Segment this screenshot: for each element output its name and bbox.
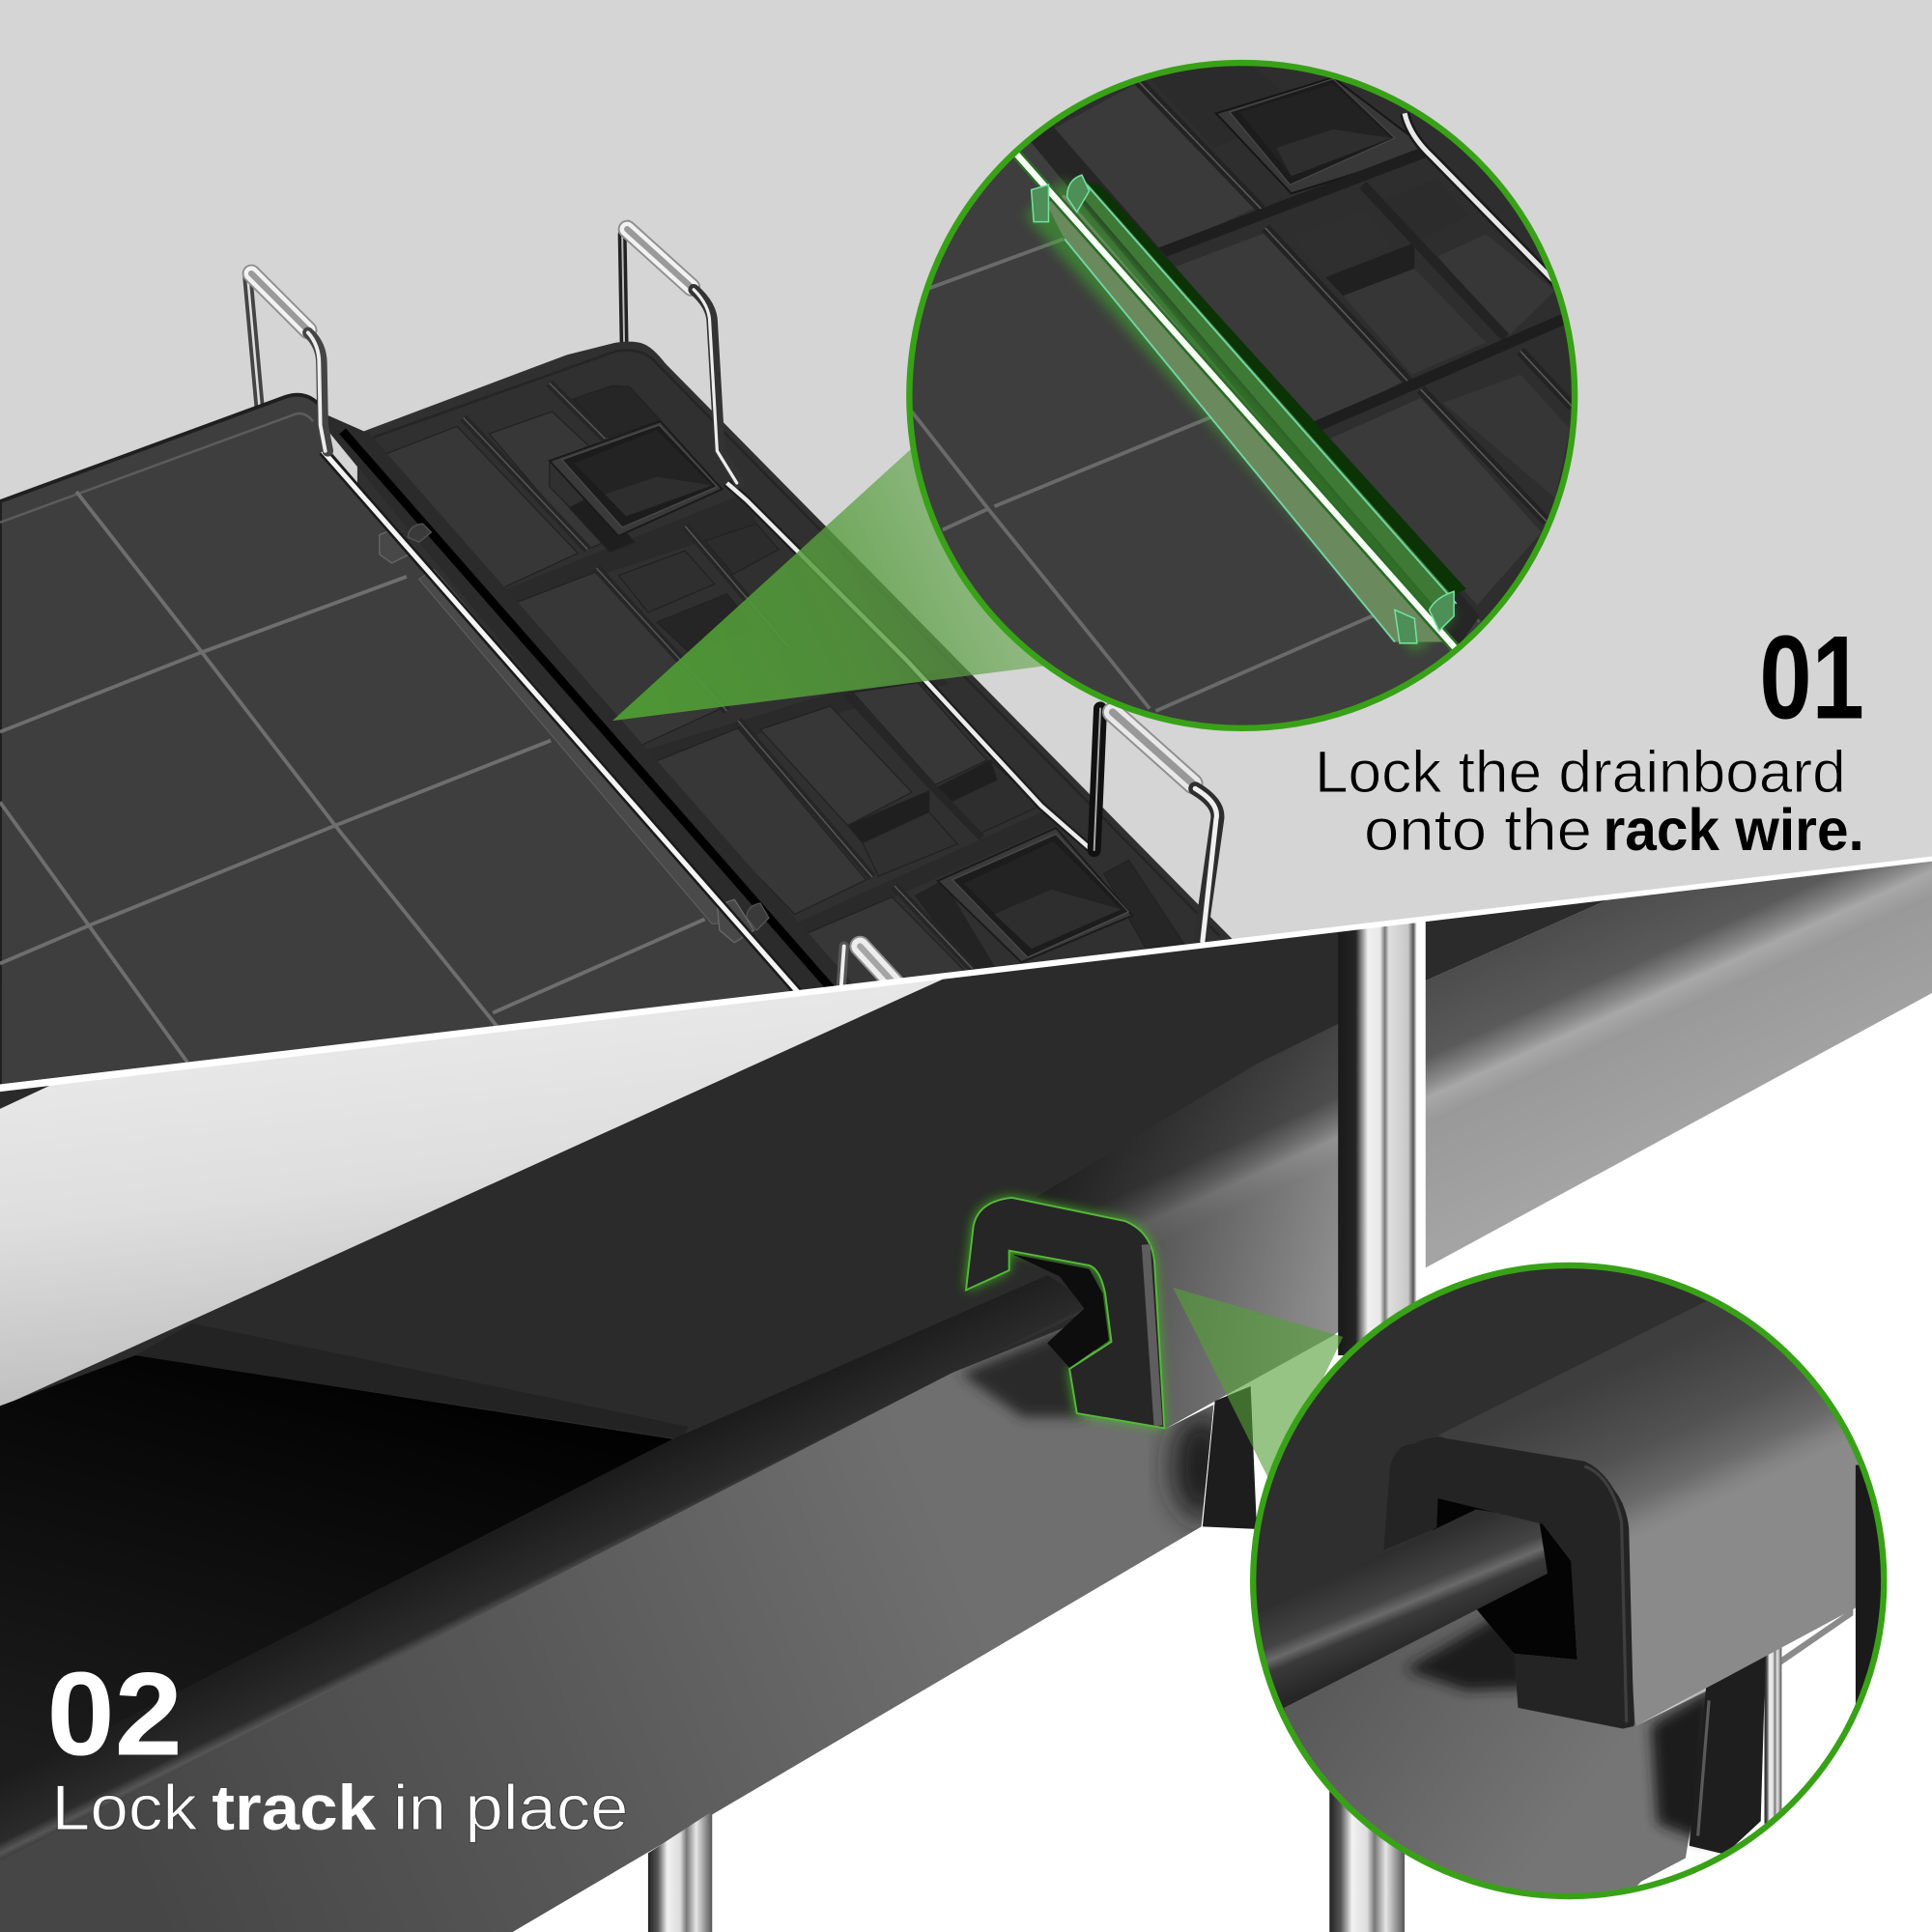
light wedge upper left bbox=[0, 971, 961, 1407]
compartment 6 bbox=[853, 683, 987, 784]
small lower right cell bbox=[938, 760, 1040, 835]
shadow next to bracket bbox=[1172, 1412, 1231, 1520]
circle 1 base bbox=[909, 63, 1575, 728]
step 01 caption bbox=[1315, 739, 1864, 863]
square cup bbox=[1216, 77, 1430, 193]
compartment 5 bbox=[760, 706, 912, 826]
pole reflection bbox=[1765, 1638, 1781, 1824]
black slot bbox=[343, 431, 850, 1010]
drainboard tabs bbox=[380, 529, 754, 943]
rod shadow near clip bbox=[961, 1324, 1084, 1417]
green rail bbox=[1069, 183, 1454, 607]
tray inner strip bbox=[135, 1323, 689, 1439]
rail edge bbox=[1046, 130, 1480, 622]
clip edge highlight bbox=[1584, 1466, 1627, 1722]
bracket leg bbox=[1690, 1654, 1766, 1855]
clip bbox=[1383, 1437, 1634, 1729]
end tabs bbox=[1032, 175, 1454, 643]
rim upper face bbox=[1035, 859, 1932, 1430]
grey rim block bbox=[1438, 1301, 1897, 1726]
small cell C bbox=[705, 524, 779, 574]
dark green slot bbox=[1084, 183, 1466, 596]
square cup upper bbox=[550, 421, 722, 536]
floor A bbox=[1050, 84, 1257, 251]
circle 2 contents bbox=[1233, 1301, 1897, 1922]
zoom circle 1: rack wire detail bbox=[909, 49, 1602, 739]
circle 1 contents bbox=[912, 49, 1602, 739]
green glow around wire bbox=[1045, 197, 1435, 635]
zoom circle 2: track clip detail bbox=[1233, 1265, 1897, 1922]
tray compartments bbox=[381, 385, 1184, 998]
board grid lines bbox=[912, 239, 1386, 711]
bracket shadow bbox=[1651, 1688, 1713, 1842]
cross bands bbox=[497, 493, 1062, 939]
handle 3 bbox=[1094, 708, 1217, 941]
small lower cell bbox=[863, 812, 957, 876]
white background lower right bbox=[1602, 1589, 1897, 1922]
cell right of lower cup bbox=[1104, 860, 1184, 949]
highlighted track clip bbox=[966, 1198, 1164, 1428]
top scene panel: drainboard on rack bbox=[0, 0, 1932, 1109]
drainboard inner rim bbox=[0, 413, 313, 523]
floor H bbox=[1438, 234, 1555, 337]
bracket under rim bbox=[1203, 1386, 1257, 1529]
upper wire bbox=[1405, 113, 1555, 282]
floor B bbox=[1171, 233, 1403, 429]
tray dividers bbox=[464, 384, 982, 969]
thin rim underside bbox=[1781, 1608, 1853, 1664]
divider strokes bbox=[1139, 81, 1573, 522]
handle 2 bbox=[627, 229, 739, 483]
cell below upper cup bbox=[569, 496, 635, 552]
compartment 2 bbox=[489, 412, 604, 550]
rim side dark strip bbox=[1856, 1465, 1886, 1713]
floor D bbox=[1443, 375, 1570, 497]
right tray wire bbox=[727, 483, 1091, 849]
handle 4 bbox=[840, 947, 902, 998]
small dark cell by handle bbox=[573, 385, 661, 438]
green callout cone 1 bbox=[612, 446, 1050, 721]
green callout cone 2 bbox=[1173, 1288, 1343, 1485]
front face bbox=[1284, 1574, 1713, 1922]
wall F bbox=[1325, 242, 1414, 296]
rim upper face left shading bbox=[1036, 1024, 1339, 1430]
cell left of lower cup bbox=[916, 881, 998, 974]
circle 2 base bbox=[1253, 1265, 1884, 1896]
dark tray wall bbox=[0, 897, 1614, 1863]
band outline bbox=[1065, 185, 1457, 642]
step 01 number: 01 bbox=[1759, 611, 1864, 744]
lower right chrome pole bbox=[1329, 1786, 1405, 1932]
lower left chrome pole bbox=[648, 1811, 712, 1932]
circle 1 ring bbox=[909, 63, 1575, 728]
compartment 1 bbox=[381, 426, 578, 590]
small cell B bbox=[657, 594, 754, 653]
clip edge highlight bbox=[1146, 1244, 1158, 1426]
step 01 caption: Lock the drainboard bbox=[1315, 739, 1846, 805]
shadow under rod bbox=[1405, 1602, 1528, 1690]
clip body bbox=[966, 1198, 1164, 1428]
lower scene: track on rack bbox=[0, 859, 1932, 1932]
step 02 caption: in place bbox=[393, 1773, 629, 1844]
small lower wall bbox=[848, 791, 929, 842]
wire bbox=[1015, 153, 1455, 648]
handle back legs bbox=[247, 234, 625, 412]
white divider line bbox=[0, 856, 1932, 1092]
compartment 7 bbox=[809, 897, 965, 970]
drainboard bbox=[0, 395, 863, 1109]
drainboard side strip bbox=[419, 569, 737, 924]
clip glow bbox=[966, 1198, 1164, 1428]
floor C bbox=[1324, 398, 1542, 605]
rack wire bbox=[323, 451, 801, 996]
step 02 number: 02 bbox=[46, 1647, 183, 1779]
floor E bbox=[1292, 211, 1394, 277]
handle 1 bbox=[251, 273, 327, 451]
step 02 caption bbox=[52, 1773, 629, 1844]
square cup lower bbox=[938, 828, 1132, 962]
right tray section bbox=[1046, 49, 1602, 739]
circle 2 ring bbox=[1253, 1265, 1884, 1896]
step 02 caption: track bbox=[212, 1773, 376, 1844]
rail tabs bbox=[408, 524, 769, 930]
drainboard grid lines bbox=[0, 492, 705, 1062]
compartment 4 bbox=[649, 728, 867, 914]
floor F bbox=[1343, 269, 1486, 375]
clip opening bbox=[1012, 1254, 1109, 1368]
rim front face bbox=[0, 1324, 1213, 1932]
black opening bbox=[1430, 1498, 1577, 1660]
grey background bbox=[0, 0, 1932, 939]
olive track band bbox=[1046, 195, 1449, 642]
rail between trays bbox=[308, 407, 887, 1023]
step 01 caption: onto the bbox=[1364, 797, 1592, 863]
compartment 3 bbox=[510, 572, 721, 746]
upper chrome pole bbox=[1338, 912, 1426, 1355]
track rod bbox=[0, 1275, 1096, 1861]
bracket highlight bbox=[1698, 1700, 1709, 1836]
floor upper bbox=[1146, 49, 1306, 148]
floor G bbox=[1385, 179, 1468, 239]
small cell A bbox=[618, 551, 715, 612]
tray outer rim shade bbox=[370, 351, 1220, 936]
step 01 caption: rack wire. bbox=[1603, 797, 1864, 863]
compartments bbox=[1050, 49, 1570, 605]
tray interior shadow bbox=[0, 1355, 672, 1783]
right tray body bbox=[357, 342, 1233, 971]
step 02 caption: Lock bbox=[52, 1773, 198, 1844]
dark corner under divider bbox=[0, 1076, 70, 1109]
small lower right wall bbox=[938, 760, 997, 801]
dark channel bbox=[1015, 118, 1480, 653]
rod bbox=[1233, 1509, 1548, 1725]
